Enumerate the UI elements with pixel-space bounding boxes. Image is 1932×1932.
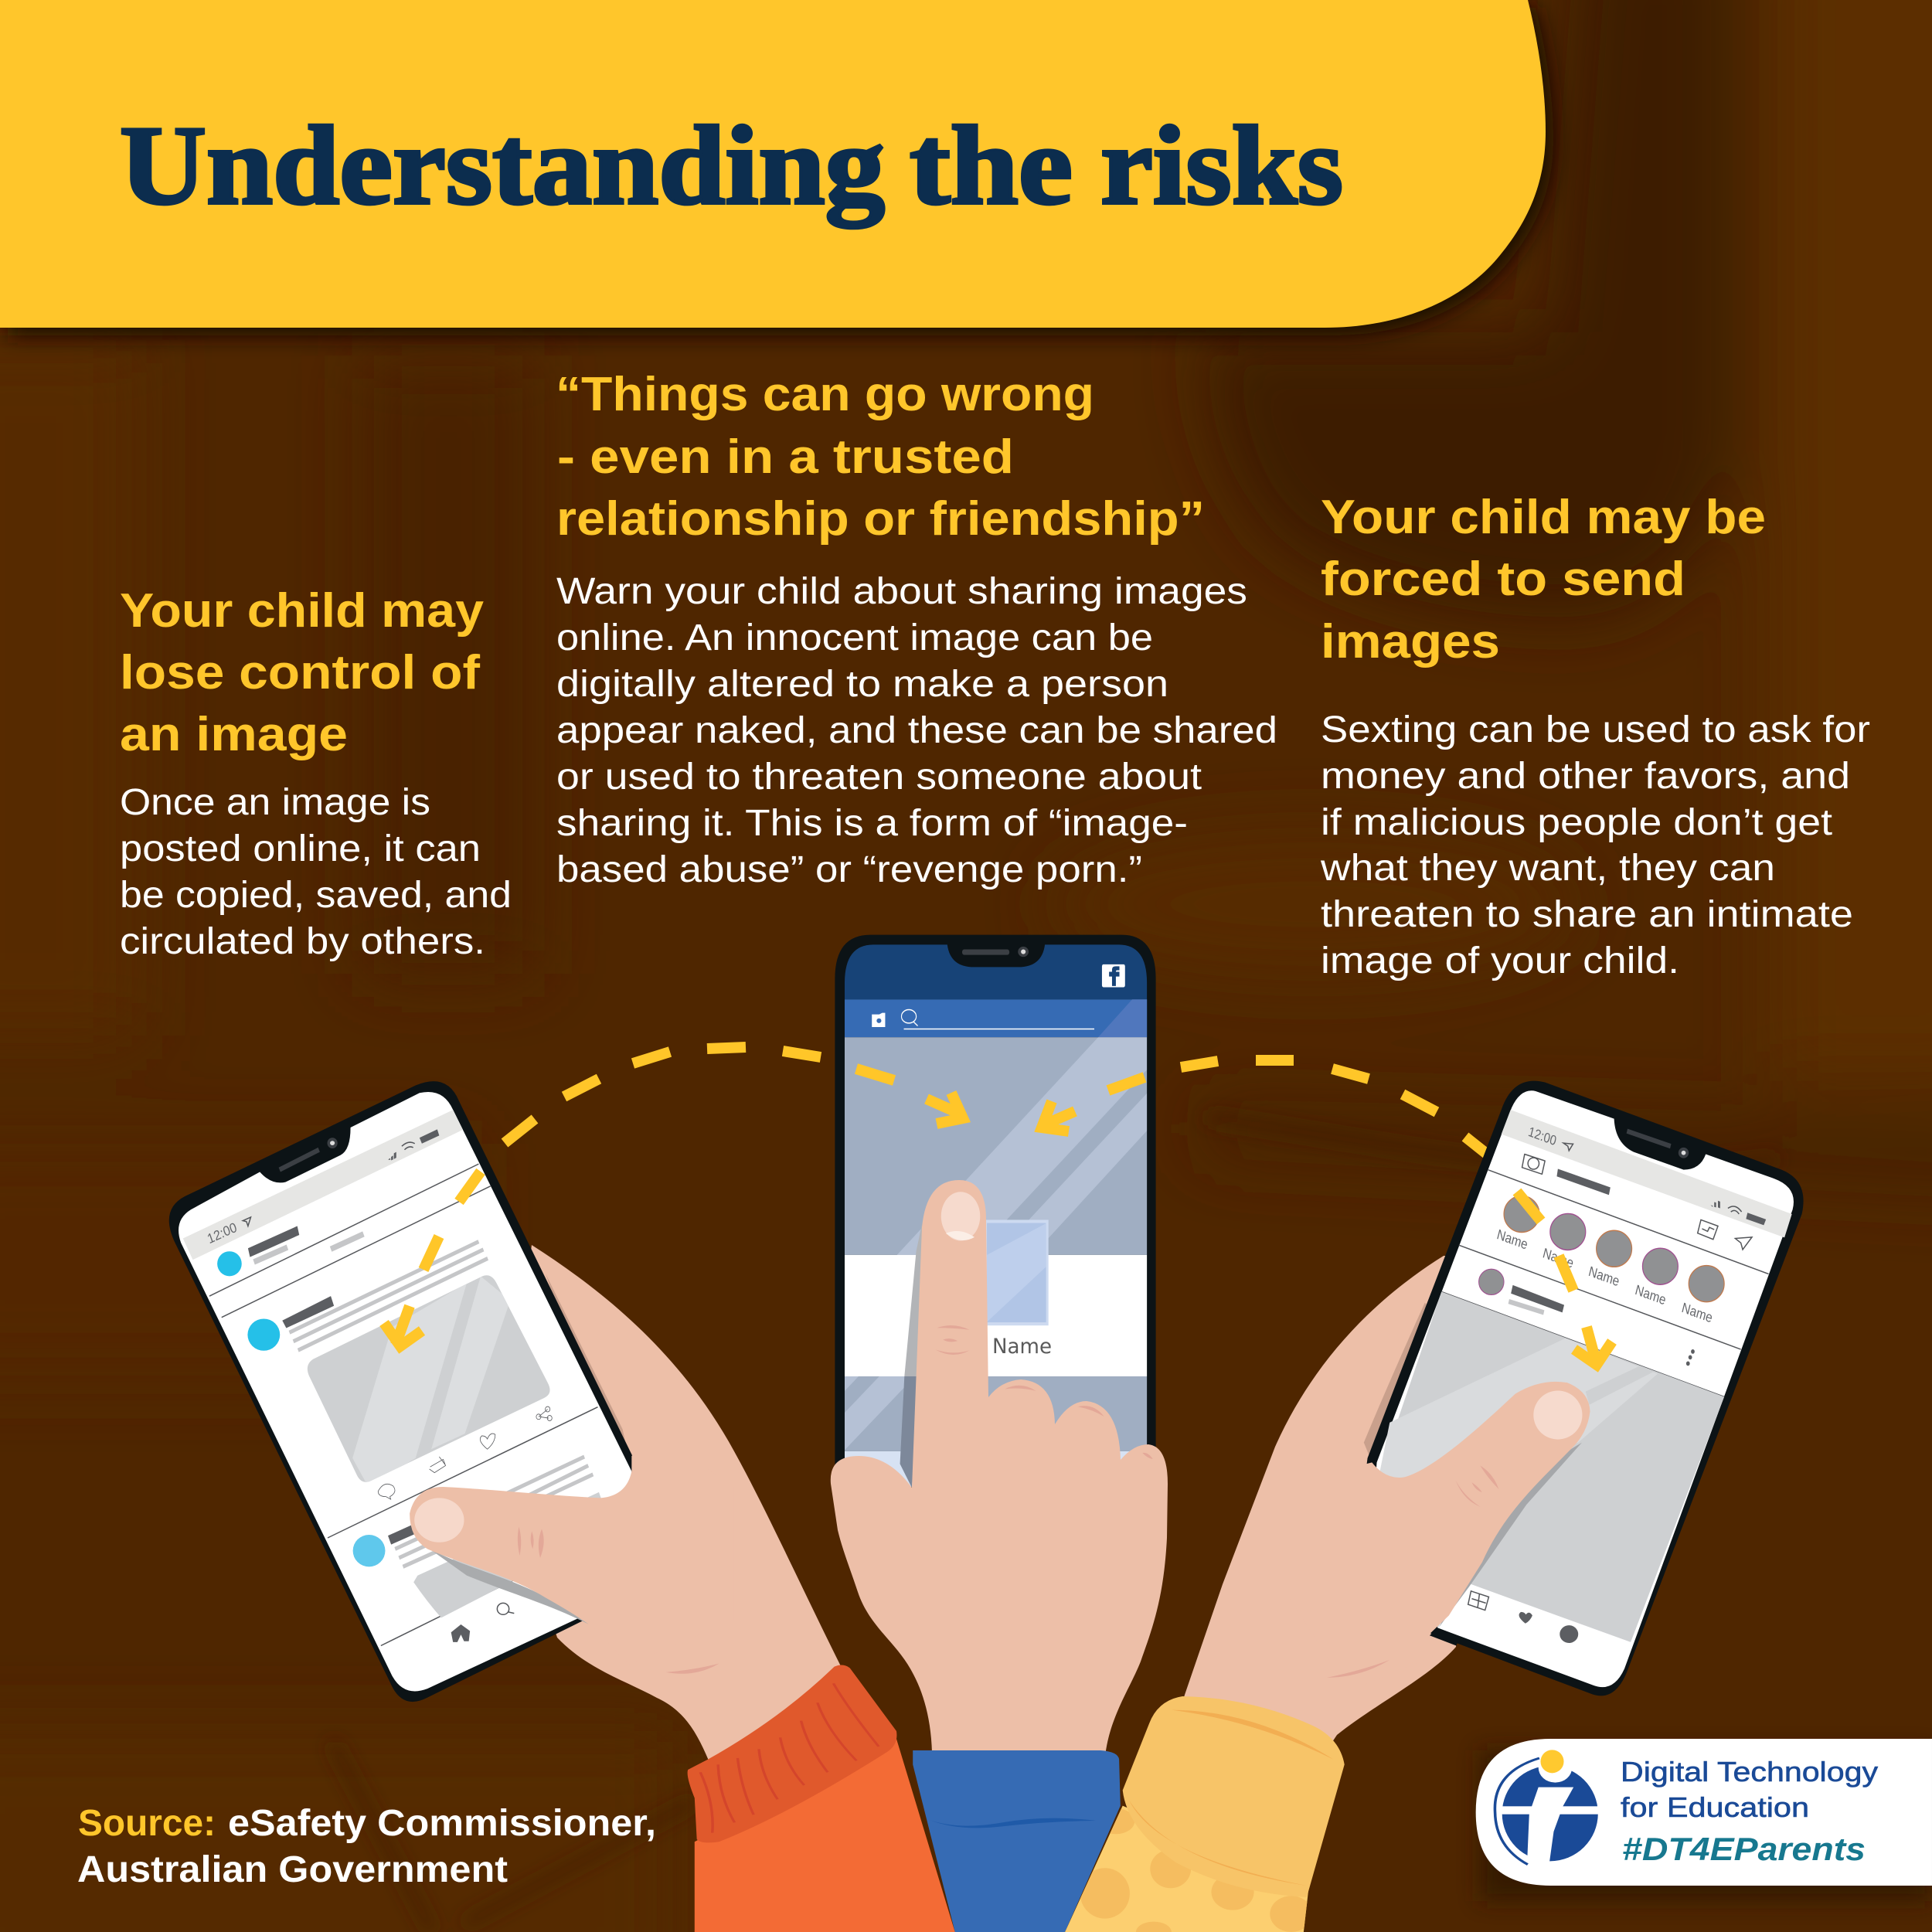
body: Warn your child about sharing images — [556, 571, 1247, 612]
thumb creases — [1455, 1465, 1498, 1507]
left hand, back — [502, 1245, 842, 1766]
phone body — [835, 935, 1156, 1503]
text block: things can go wrong — [556, 368, 1277, 890]
logo mark — [1495, 1750, 1600, 1865]
body — [1320, 709, 1870, 981]
body: what they want, they can — [1320, 848, 1775, 889]
banner shadow — [8, 8, 1553, 335]
finger nail — [941, 1192, 980, 1241]
body: online. An innocent image can be — [556, 617, 1153, 658]
body: appear naked, and these can be shared — [556, 710, 1277, 751]
body: Once an image is — [120, 782, 430, 823]
right thumb and palm — [1275, 1382, 1590, 1691]
header band — [845, 944, 1147, 999]
body: digitally altered to make a person — [556, 664, 1168, 705]
heading — [1321, 491, 1766, 668]
heading — [120, 584, 485, 761]
feed header — [217, 1226, 363, 1276]
search bar — [845, 999, 1147, 1037]
title: risks — [1100, 103, 1343, 228]
finger shadow — [900, 1223, 923, 1488]
heading: forced to send — [1321, 553, 1685, 606]
status bar — [1502, 1110, 1792, 1237]
post image — [308, 1275, 550, 1482]
source credit: eSafety Commissioner, — [228, 1803, 656, 1844]
heading: “Things can go wrong — [556, 368, 1094, 421]
wrist crease — [666, 1663, 719, 1674]
thumb nail — [1533, 1390, 1582, 1440]
body: sharing it. This is a form of “image- — [556, 803, 1188, 844]
stories — [1495, 1196, 1724, 1326]
heading: Your child may — [120, 584, 485, 638]
yellow path across left phone — [384, 1172, 481, 1346]
text block: lose control — [120, 584, 512, 962]
bottom phone edge — [1430, 1628, 1460, 1645]
screen — [179, 1092, 631, 1691]
facebook icon — [1102, 964, 1125, 987]
body: threaten to share an intimate — [1321, 894, 1853, 935]
body: image of your child. — [1321, 940, 1679, 981]
action bar — [845, 1451, 1147, 1487]
body — [120, 782, 512, 962]
blue sleeve — [913, 1750, 1121, 1932]
status bar — [183, 1110, 463, 1260]
logo text: Digital Technology — [1621, 1756, 1878, 1787]
thumb shadow — [423, 1545, 589, 1624]
phone middle — [835, 935, 1156, 1503]
title banner — [0, 0, 1546, 328]
yellow sleeve — [1065, 1696, 1345, 1932]
middle hand — [831, 1180, 1168, 1770]
heading: an image — [120, 708, 348, 761]
speaker and camera — [962, 947, 1029, 957]
phone right — [1275, 1081, 1804, 1696]
logo text — [1621, 1756, 1878, 1867]
heading: lose control of — [120, 646, 480, 699]
screen — [1375, 1090, 1794, 1687]
body: money and other favors, and — [1321, 756, 1850, 797]
cover image — [845, 1037, 1147, 1451]
title: Understanding — [120, 103, 885, 228]
thumb creases — [518, 1527, 544, 1558]
phone body — [169, 1081, 688, 1702]
profile name: Name — [992, 1335, 1052, 1359]
heading: images — [1321, 615, 1500, 668]
menu dots — [1686, 1349, 1695, 1366]
shadow on hand — [546, 1274, 632, 1474]
logo badge — [1476, 1739, 1932, 1886]
speaker and camera — [1627, 1131, 1689, 1158]
profile band — [845, 1255, 1147, 1376]
body: if malicious people don’t get — [1321, 802, 1832, 843]
logo text: for Education — [1621, 1791, 1809, 1823]
stories: Name — [1680, 1300, 1714, 1326]
bottom nav — [1468, 1591, 1578, 1643]
body: Sexting can be used to ask for — [1321, 709, 1870, 750]
logo badge shadow — [1480, 1750, 1932, 1901]
post — [247, 1242, 552, 1499]
wrist crease — [1327, 1660, 1389, 1678]
middle hand details — [935, 1192, 1153, 1459]
heading: - even in a trusted — [557, 430, 1014, 484]
notch speaker and camera — [280, 1138, 338, 1170]
stories: Name — [1634, 1282, 1668, 1308]
knuckle creases — [935, 1325, 1153, 1459]
bottom nav icons — [451, 1603, 514, 1642]
phone left — [169, 1081, 734, 1702]
right hand, back — [1159, 1256, 1468, 1777]
profile picture — [986, 1222, 1047, 1324]
logo text: #DT4EParents — [1622, 1831, 1866, 1867]
shadow on hand — [1364, 1303, 1432, 1462]
title — [120, 103, 1343, 228]
app header — [1522, 1155, 1752, 1250]
left thumb and palm — [410, 1443, 734, 1665]
orange sleeve — [688, 1665, 955, 1932]
yellow path across right phone — [1517, 1192, 1612, 1365]
heading — [556, 368, 1205, 546]
body: be copied, saved, and — [120, 875, 512, 916]
feed dividers — [209, 1164, 597, 1645]
phone body — [1349, 1081, 1804, 1696]
heading: Your child may be — [1321, 491, 1766, 544]
stories: Name — [1541, 1245, 1575, 1271]
yellow path across middle phone — [856, 1069, 1145, 1131]
stories: Name — [1495, 1226, 1529, 1253]
text block: forced to send — [1320, 491, 1870, 981]
thumb nail — [414, 1498, 464, 1543]
body: circulated by others. — [120, 921, 485, 962]
dividers — [1441, 1170, 1769, 1396]
body: based abuse” or “revenge porn.” — [556, 849, 1142, 890]
source credit: Source: — [78, 1803, 216, 1844]
post author — [1479, 1269, 1564, 1312]
stories: Name — [1587, 1264, 1621, 1290]
source credit: Australian Government — [77, 1849, 508, 1890]
status bar: 12:00 — [206, 1219, 239, 1247]
post actions — [378, 1406, 552, 1499]
heading: relationship or friendship” — [556, 492, 1205, 546]
title: the — [910, 103, 1073, 228]
photo — [1375, 1291, 1724, 1642]
status bar: 12:00 — [1527, 1124, 1558, 1149]
body — [556, 571, 1277, 890]
body: posted online, it can — [120, 828, 481, 869]
thumb shadow — [1438, 1443, 1582, 1628]
dashed arc — [505, 1047, 1495, 1161]
source credit — [77, 1803, 656, 1890]
sleeves — [688, 1665, 1345, 1932]
next post — [353, 1457, 605, 1617]
body: or used to threaten someone about — [556, 757, 1202, 798]
